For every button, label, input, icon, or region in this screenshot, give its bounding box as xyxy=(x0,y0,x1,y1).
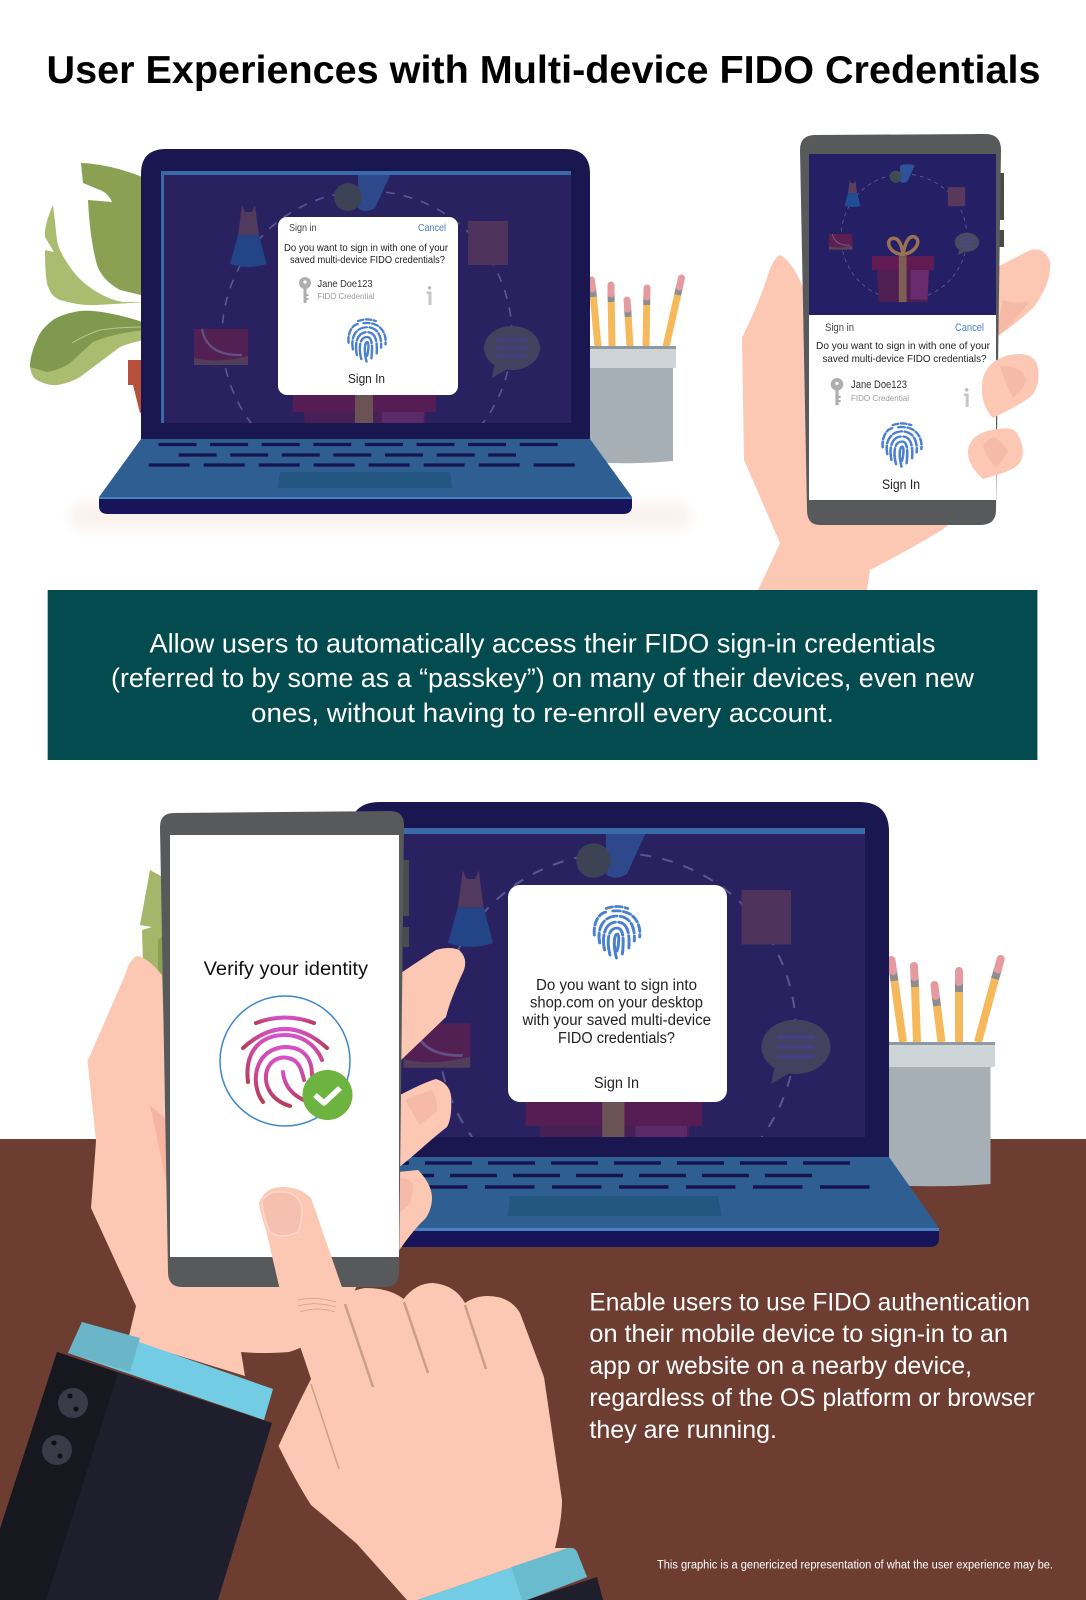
icon: fingerprint circle xyxy=(220,996,350,1126)
pencil cup xyxy=(585,278,682,463)
footnote: This graphic is a genericized representation of what the user experience may be. xyxy=(657,1560,1053,1572)
body text: mobile authentication: on their mobile device to sign-in to an xyxy=(589,1320,1008,1348)
sign-in dialog: Sign In xyxy=(348,371,385,386)
phone dialog text: FIDO Credential xyxy=(851,393,909,403)
body text: mobile authentication: regardless of the OS platform or browser xyxy=(589,1384,1035,1412)
desktop dialog: Sign In xyxy=(594,1075,639,1092)
body text: mobile authentication: Enable users to use FIDO authentication xyxy=(589,1288,1030,1316)
body text: mobile authentication xyxy=(589,1288,1035,1444)
jacket buttons xyxy=(42,1388,88,1465)
middle finger xyxy=(982,354,1039,418)
phone dialog text: Cancel xyxy=(955,322,984,334)
teal banner: ones, without having to re-enroll every account. xyxy=(251,698,834,728)
icon: key xyxy=(831,378,843,405)
pencil cup: bottom scene xyxy=(880,959,1001,1186)
ring finger xyxy=(968,428,1023,479)
phone scene: top xyxy=(742,134,1050,590)
laptop lid xyxy=(141,149,590,440)
laptop screen xyxy=(161,171,571,423)
phone: verify identity xyxy=(160,811,409,1287)
pencils xyxy=(592,278,682,347)
laptop scene: bottom xyxy=(300,802,939,1247)
laptop keyboard base xyxy=(300,1157,939,1247)
verify heading: Verify your identity xyxy=(204,959,369,980)
sign-in dialog xyxy=(278,217,458,395)
phone dialog text: Sign In xyxy=(882,477,920,492)
body text: mobile authentication: app or website on a nearby device, xyxy=(589,1352,972,1380)
phone dialog text: Jane Doe123 xyxy=(851,379,907,391)
phone dialog text: saved multi-device FIDO credentials? xyxy=(822,353,987,365)
fingernail xyxy=(262,1192,302,1236)
sign-in dialog: Sign in xyxy=(289,222,317,234)
desktop dialog: FIDO credentials? xyxy=(558,1030,675,1047)
left hand: palm and thumb xyxy=(88,956,357,1376)
icon: fingerprint xyxy=(883,423,921,467)
left hand: finger three xyxy=(398,1170,432,1252)
plant xyxy=(30,163,145,413)
phone dialog text xyxy=(816,322,990,492)
phone dialog text: Sign in xyxy=(825,322,854,334)
icon: green check xyxy=(302,1070,352,1120)
laptop keyboard base xyxy=(99,439,632,514)
phone dialog text: Do you want to sign in with one of your xyxy=(816,340,990,352)
icon: key xyxy=(299,277,311,303)
teal banner: Allow users to automatically access their FIDO sign-in credentials xyxy=(150,628,936,658)
sign-in dialog: saved multi-device FIDO credentials? xyxy=(290,255,445,266)
desktop dialog xyxy=(508,885,727,1102)
pencils xyxy=(892,959,1001,1042)
icon: fingerprint xyxy=(594,906,640,958)
right hand: pointing xyxy=(259,1187,568,1600)
desk shadow xyxy=(70,503,690,529)
desktop dialog: Do you want to sign into xyxy=(536,977,697,994)
desk xyxy=(0,1139,1086,1600)
sign-in dialog: Do you want to sign in with one of your xyxy=(284,243,449,254)
sign-in dialog: Jane Doe123 xyxy=(318,278,373,290)
icon: info xyxy=(964,388,969,407)
left cuff xyxy=(68,1322,273,1420)
left hand: finger one xyxy=(398,948,465,1063)
index finger xyxy=(995,249,1050,338)
laptop scene: top xyxy=(30,149,690,529)
left hand: finger two xyxy=(398,1079,451,1168)
teal banner: (referred to by some as a “passkey”) on many of their devices, even new xyxy=(111,663,975,693)
laptop screen xyxy=(401,828,865,1137)
teal banner xyxy=(48,590,1037,760)
phone body xyxy=(800,134,1004,525)
left jacket sleeve xyxy=(0,1352,272,1600)
sign-in dialog: Cancel xyxy=(418,222,446,234)
right jacket sleeve xyxy=(527,1577,603,1600)
icon: fingerprint xyxy=(348,319,386,362)
desktop dialog: with your saved multi-device xyxy=(522,1012,711,1029)
right cuff xyxy=(418,1548,587,1600)
sign-in dialog: FIDO Credential xyxy=(318,292,375,301)
knuckle lines xyxy=(298,1298,486,1469)
desktop dialog: shop.com on your desktop xyxy=(530,995,703,1012)
hand palm xyxy=(742,255,1000,590)
laptop lid xyxy=(350,802,889,1158)
body text: mobile authentication: they are running. xyxy=(589,1416,777,1444)
plant: bottom scene xyxy=(140,870,168,1090)
title: User Experiences with Multi-device FIDO Credentials xyxy=(46,49,1040,92)
icon: info xyxy=(426,286,432,305)
